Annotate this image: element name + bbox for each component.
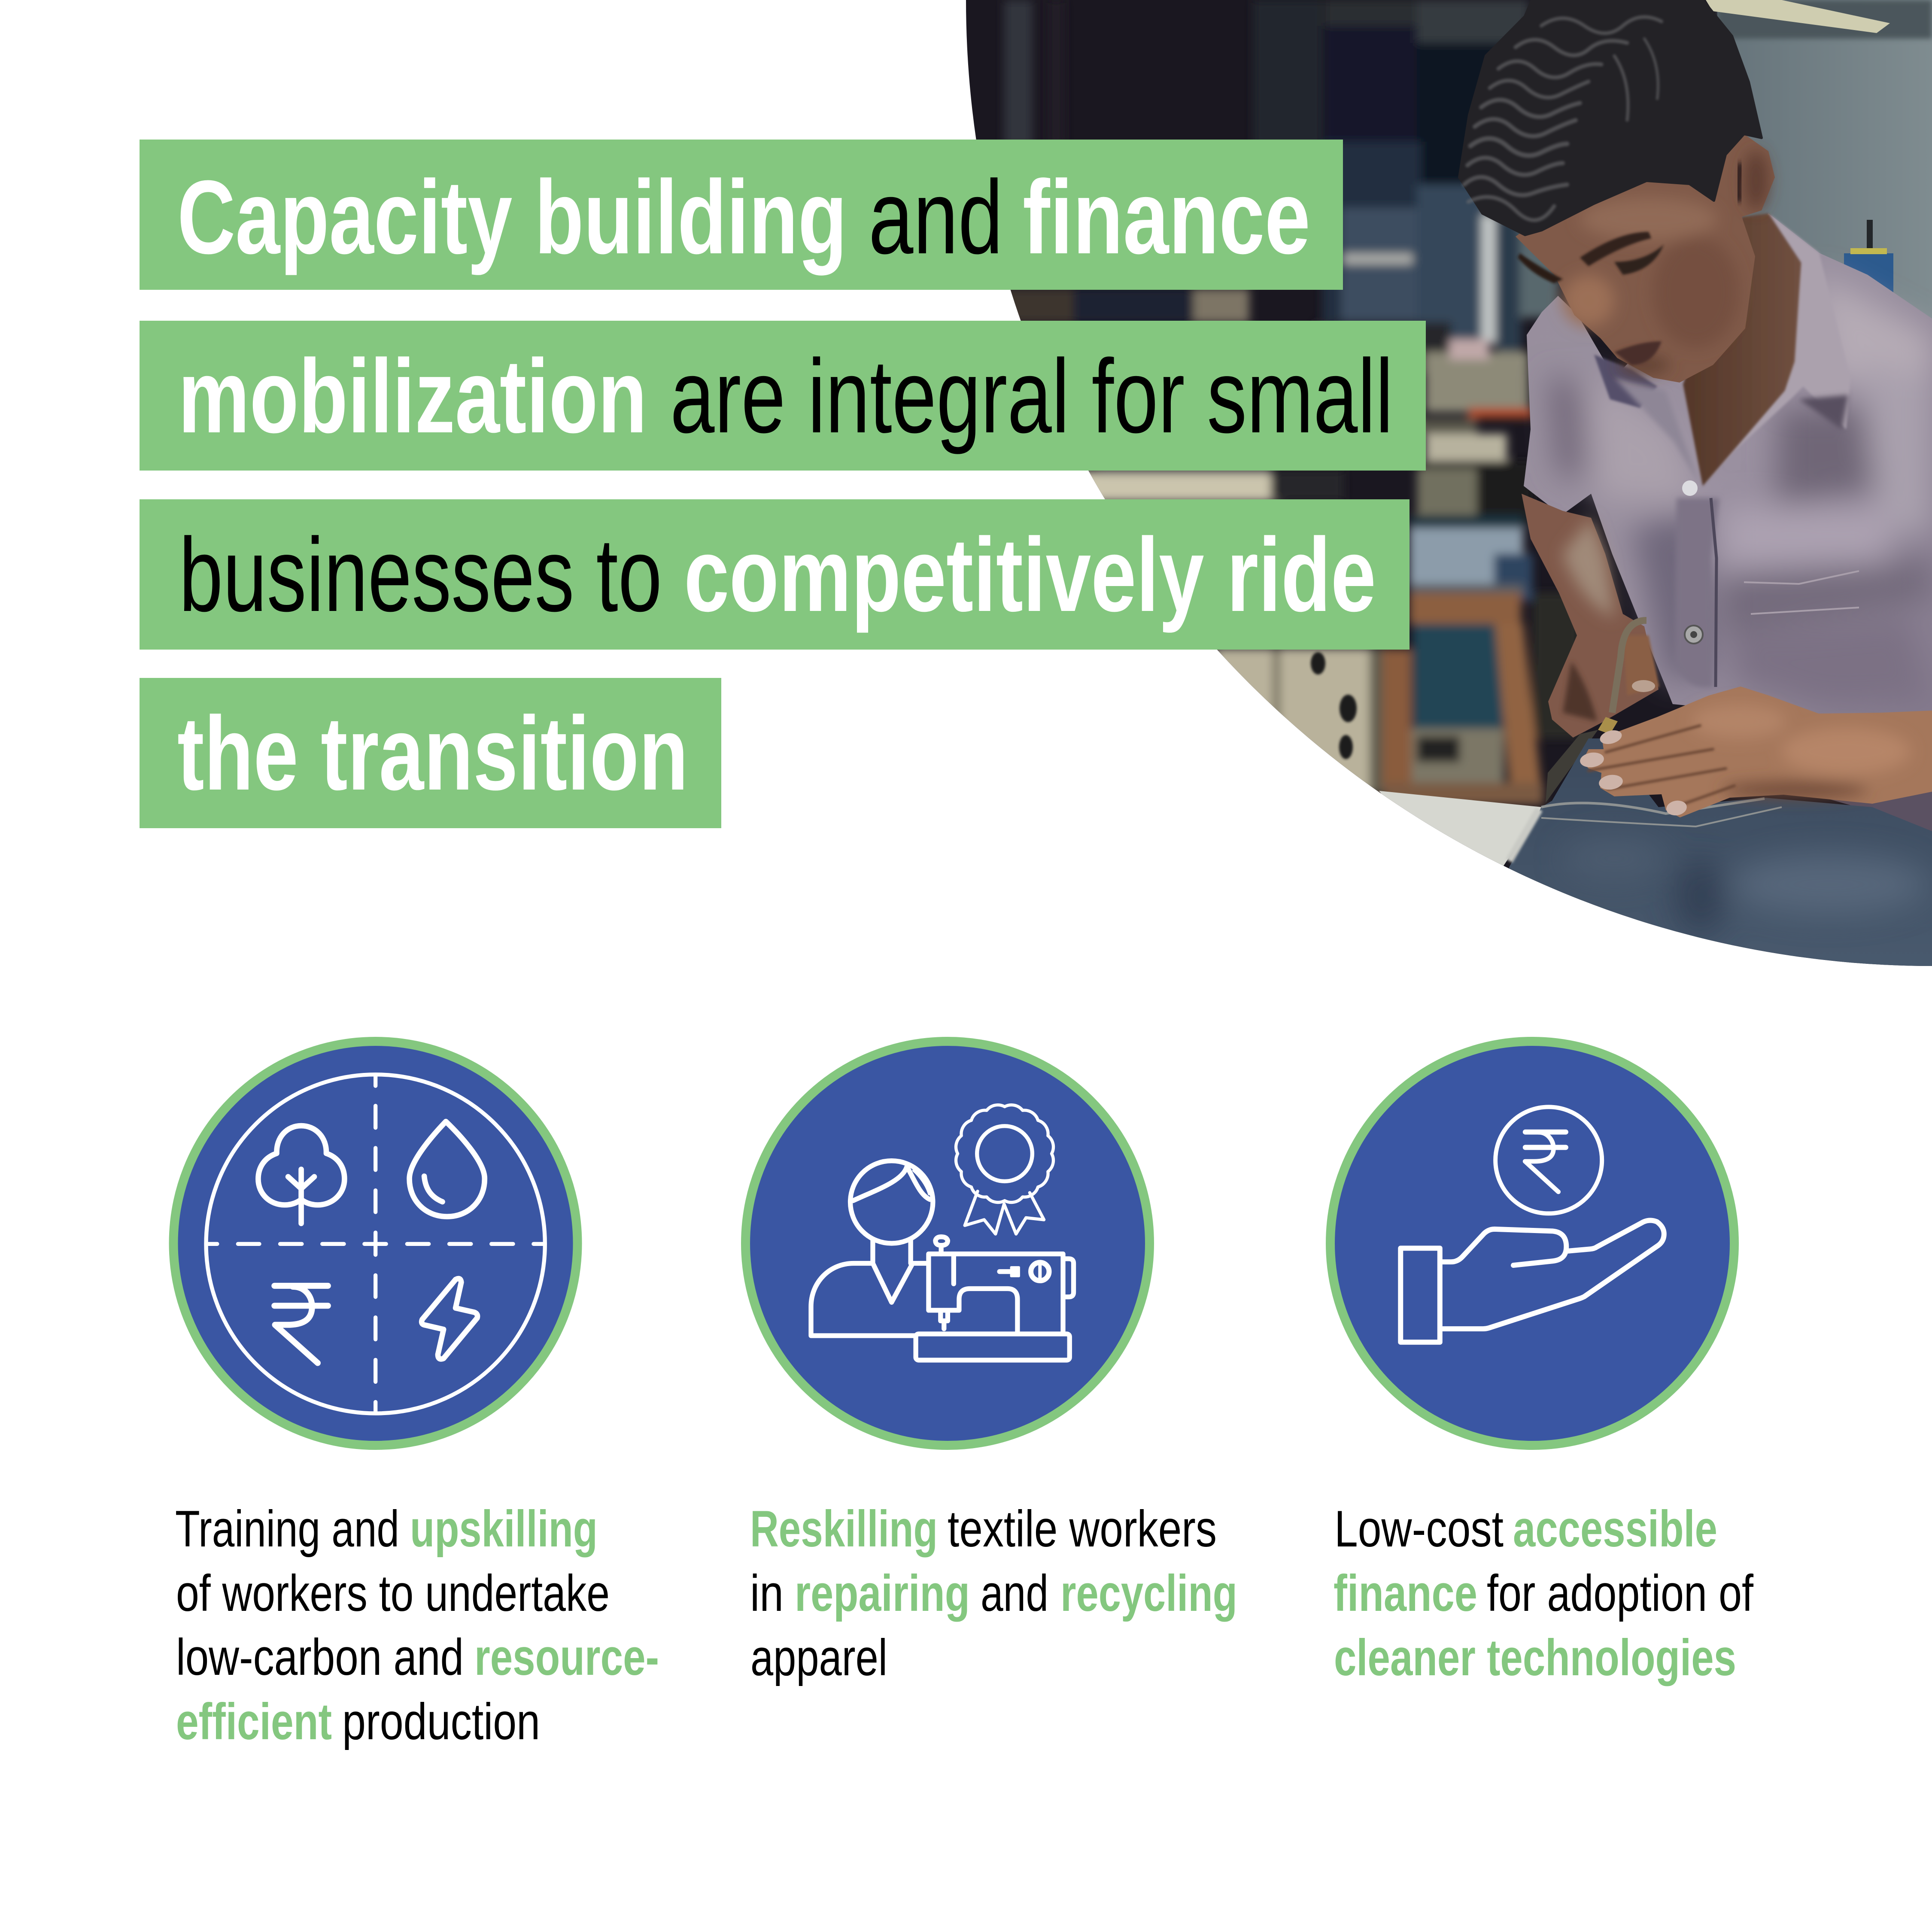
headline line 1 — [140, 140, 1343, 290]
headline line 3: competitively ride — [684, 516, 1376, 633]
headline — [140, 140, 1426, 828]
text block: low-cost accessible finance: cleaner technologies — [1334, 1629, 1736, 1686]
cutting table — [1379, 791, 1542, 880]
jeans — [1503, 738, 1932, 987]
headline line 1: Capacity building — [177, 158, 847, 276]
text block: training and upskilling: Training and — [175, 1500, 399, 1558]
headline line 1: and — [869, 158, 1003, 276]
photo background: workshop — [945, 0, 1932, 987]
headline line 4: the transition — [177, 695, 688, 812]
text block: low-cost accessible finance: finance — [1334, 1564, 1477, 1622]
hair — [1459, 0, 1762, 235]
icon: lightning bolt — [422, 1279, 477, 1359]
photo: textile worker cutting denim, clipped to quarter circle — [945, 0, 1932, 987]
quadrant ring and dashed dividers — [206, 1075, 545, 1413]
text block: reskilling textile workers: Reskilling — [750, 1500, 938, 1558]
ear detail — [1738, 163, 1741, 202]
person — [811, 1161, 933, 1336]
scissors — [1546, 620, 1646, 803]
text block: training and upskilling: production — [342, 1693, 540, 1750]
text block: low-cost accessible finance: for adoption of — [1487, 1564, 1754, 1622]
arm and scissors hand — [1522, 494, 1659, 738]
text block: training and upskilling: upskilling — [410, 1500, 598, 1558]
headline line 1: finance — [1023, 158, 1310, 276]
icon: four resources circle — [173, 1042, 577, 1445]
text block: reskilling textile workers: repairing — [795, 1564, 970, 1622]
buttons — [1685, 626, 1703, 644]
icon: rupee — [274, 1286, 328, 1363]
right hand and forearm — [1579, 687, 1932, 817]
sewing machine — [916, 1237, 1074, 1360]
placket and pocket — [1674, 498, 1719, 687]
icon: worker at sewing machine with award — [745, 1042, 1150, 1445]
wall, upper right — [1717, 0, 1932, 319]
text block: reskilling textile workers: recycling — [1060, 1564, 1237, 1622]
headline line 4 — [140, 678, 721, 828]
icon: tree — [258, 1126, 344, 1224]
neck — [1683, 213, 1801, 486]
thread spool — [1844, 220, 1893, 294]
headline line 2: mobilization — [178, 337, 647, 455]
icon: hand holding rupee coin — [1330, 1042, 1735, 1445]
icon: water drop — [410, 1121, 485, 1217]
text block: reskilling textile workers — [750, 1500, 1237, 1686]
text block: reskilling textile workers: in — [750, 1564, 784, 1622]
shirt — [1524, 213, 1932, 730]
text block: reskilling textile workers: textile workers — [948, 1500, 1217, 1558]
text block: reskilling textile workers: apparel — [750, 1629, 887, 1686]
rupee coin — [1495, 1107, 1602, 1213]
machine holes — [1311, 652, 1357, 759]
face — [1516, 134, 1775, 383]
text block: reskilling textile workers: and — [981, 1564, 1048, 1622]
collar — [1594, 355, 1657, 408]
ceiling fixture — [1706, 0, 1890, 33]
headline line 2: are integral for small — [670, 337, 1393, 455]
text block: training and upskilling: low-carbon and — [176, 1628, 464, 1686]
dark shirt hem behind hand — [1782, 773, 1932, 841]
headline line 3 — [140, 499, 1410, 650]
text block: training and upskilling: of workers to undertake — [176, 1564, 610, 1622]
hand and cuff — [1400, 1220, 1664, 1342]
headline line 2 — [140, 321, 1426, 471]
text block: low-cost accessible finance: accessible — [1513, 1500, 1717, 1558]
headline line 3: businesses to — [179, 516, 662, 633]
text block: training and upskilling — [175, 1500, 659, 1750]
text block: low-cost accessible finance: Low-cost — [1334, 1500, 1504, 1558]
brow and eye — [1580, 232, 1651, 266]
text block: training and upskilling: resource- — [474, 1628, 659, 1686]
thumb nail — [1632, 680, 1655, 692]
text block: low-cost accessible finance — [1334, 1500, 1754, 1686]
award rosette — [956, 1105, 1053, 1234]
fingernails — [1579, 728, 1688, 817]
text block: training and upskilling: efficient — [176, 1693, 332, 1750]
